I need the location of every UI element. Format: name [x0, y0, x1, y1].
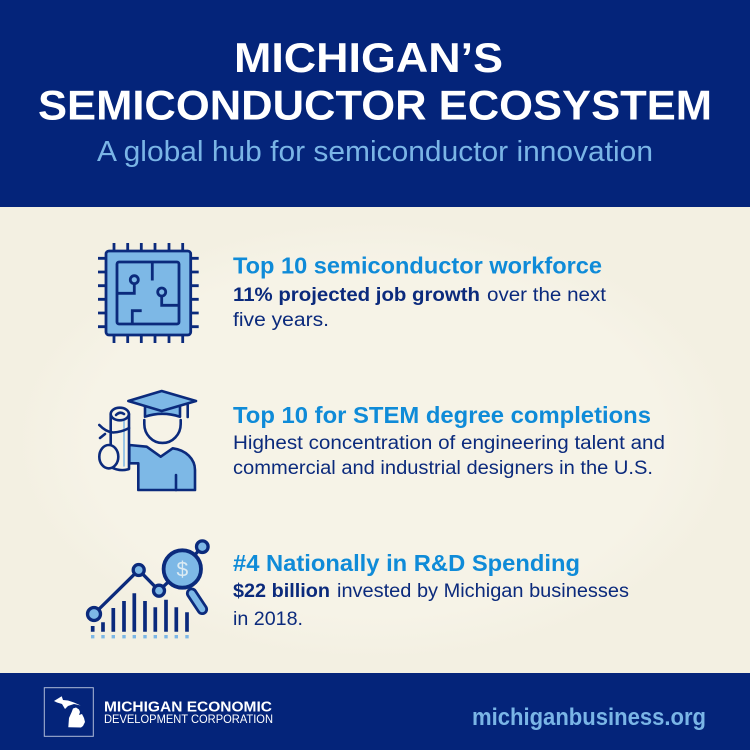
title: MICHIGAN’S — [234, 34, 503, 81]
text block: STEM degrees: commercial and industrial designers in the U.S. — [233, 458, 653, 479]
logo text: DEVELOPMENT CORPORATION — [104, 714, 273, 726]
text block: R&D spending: invested by Michigan businesses — [337, 581, 629, 602]
icon: graduate with diploma — [99, 391, 196, 490]
text block: workforce — [233, 252, 607, 331]
panel: footer band — [0, 673, 750, 750]
icon: chart with magnifier — [88, 541, 208, 638]
panel: cream background — [0, 207, 750, 673]
text block: workforce: Top 10 semiconductor workforce — [233, 252, 602, 278]
logo text: MICHIGAN ECONOMIC — [104, 700, 273, 716]
logo text — [104, 700, 273, 726]
text block: STEM degrees: Top 10 for STEM degree completions — [233, 402, 651, 428]
text block: STEM degrees: Highest concentration of engineering talent and — [233, 433, 665, 454]
icon: microchip — [98, 243, 199, 343]
title: SEMICONDUCTOR ECOSYSTEM — [38, 82, 712, 128]
text block: R&D spending: $22 billion — [233, 581, 330, 602]
title — [38, 34, 712, 128]
text block: workforce: 11% projected job growth — [233, 285, 480, 306]
panel: header band — [0, 0, 750, 207]
text block: R&D spending: #4 Nationally in R&D Spending — [233, 550, 580, 576]
text block: STEM degrees — [233, 402, 665, 479]
subtitle: A global hub for semiconductor innovation — [97, 136, 653, 168]
text block: workforce: five years. — [233, 310, 329, 331]
text block: R&D spending — [233, 550, 629, 630]
website url: michiganbusiness.org — [472, 704, 706, 731]
icon: chart with magnifier: $ — [176, 558, 188, 582]
text block: workforce: over the next — [487, 285, 607, 306]
text block: R&D spending: in 2018. — [233, 609, 303, 630]
logo: Michigan outline — [44, 688, 93, 736]
